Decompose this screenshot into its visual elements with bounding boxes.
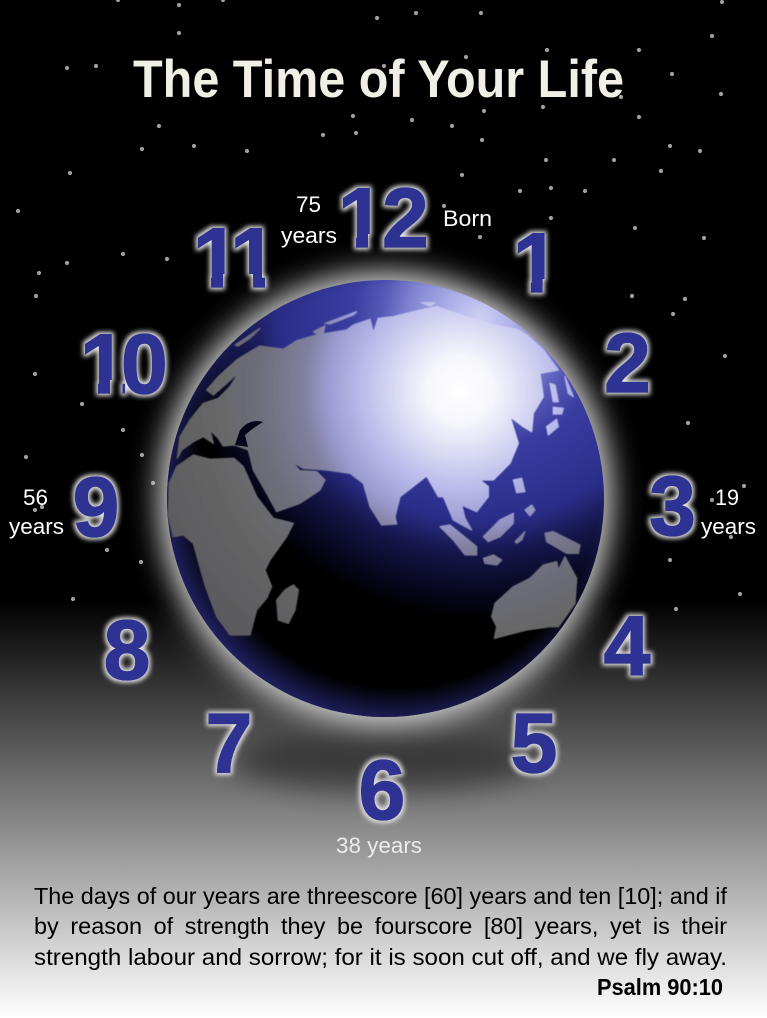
globe rim light — [167, 280, 604, 717]
label: 19 years: 19 — [715, 485, 739, 510]
Asian islands — [440, 377, 580, 565]
globe ocean — [167, 280, 604, 717]
numeral 12: 12 — [338, 171, 426, 265]
scripture quotation: The days of our years are threescore [60] years and ten [10]; and if — [34, 883, 728, 909]
label: 19 years — [701, 485, 756, 539]
numeral 2: 2 — [604, 316, 651, 410]
label: Born: Born — [443, 206, 492, 231]
numeral 11: 11 — [193, 211, 275, 305]
scripture quotation: strength labour and sorrow; for it is soon cut off, and we fly away. — [34, 944, 727, 970]
scripture citation: Psalm 90:10 — [597, 974, 723, 1000]
numeral 1: 1 — [513, 216, 559, 310]
label: 75 years: 75 — [296, 192, 321, 217]
Arctic islands — [235, 303, 522, 346]
title: The Time of Your Life — [133, 50, 624, 109]
ground shadow under globe — [235, 732, 535, 792]
label: 56 years — [9, 485, 64, 539]
label: 19 years: years — [701, 514, 756, 539]
numeral 8: 8 — [104, 603, 150, 697]
numeral 6: 6 — [359, 743, 405, 837]
numeral 4: 4 — [604, 599, 651, 693]
Black Sea — [235, 421, 263, 447]
numeral 10: 10 — [80, 317, 165, 411]
label: 75 years — [281, 192, 337, 248]
Madagascar — [277, 585, 298, 623]
Africa — [168, 455, 293, 635]
label: 38 years: 38 years — [336, 833, 422, 858]
numeral 5: 5 — [511, 696, 557, 790]
globe — [167, 280, 604, 717]
scripture quotation — [34, 883, 728, 970]
scripture quotation: by reason of strength they be fourscore [80] years, yet is their — [34, 913, 727, 939]
label: 56 years: 56 — [23, 485, 48, 510]
starfield — [16, 0, 746, 611]
clock numerals — [73, 171, 696, 837]
Australia — [492, 557, 577, 638]
label: 56 years: years — [9, 514, 64, 539]
label: 75 years: years — [281, 223, 337, 248]
numeral 7: 7 — [206, 696, 252, 790]
numeral 9: 9 — [73, 460, 119, 554]
numeral 3: 3 — [649, 459, 696, 553]
globe glow — [160, 272, 612, 724]
continents — [168, 303, 580, 638]
Eurasia — [177, 307, 558, 530]
